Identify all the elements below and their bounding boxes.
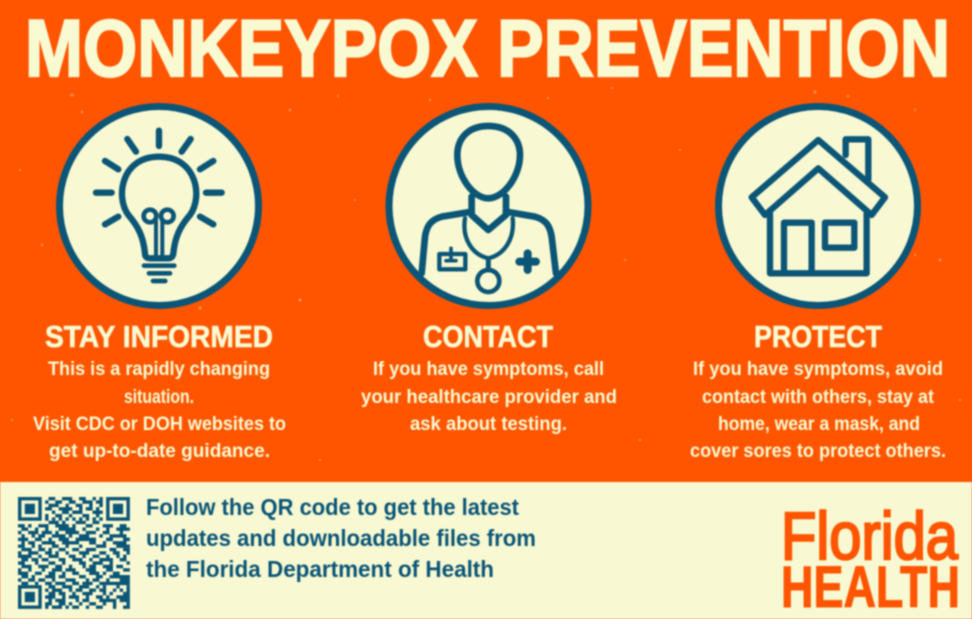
text block: QR instructions: updates and downloadable files from bbox=[146, 525, 536, 551]
panel: contact bbox=[361, 106, 617, 435]
text block: contact: your healthcare provider and bbox=[361, 387, 617, 408]
panel: stay informed bbox=[33, 106, 286, 462]
text block: QR instructions: Follow the QR code to get the latest bbox=[146, 494, 519, 520]
panel: footer bbox=[0, 482, 972, 619]
panel: protect bbox=[690, 106, 946, 462]
logo: Florida Health bbox=[781, 499, 960, 619]
text block: protect: cover sores to protect others. bbox=[690, 441, 946, 462]
text block: contact: ask about testing. bbox=[410, 414, 567, 435]
text block: stay informed: This is a rapidly changing bbox=[48, 359, 270, 380]
text block: stay informed: get up-to-date guidance. bbox=[49, 441, 270, 462]
text block: protect: contact with others, stay at bbox=[702, 387, 935, 408]
heading: contact: CONTACT bbox=[423, 319, 553, 354]
text block: protect bbox=[690, 359, 946, 462]
text block: stay informed: situation. bbox=[124, 387, 194, 408]
text block: QR instructions bbox=[146, 494, 536, 582]
heading: protect: PROTECT bbox=[754, 319, 882, 354]
text block: stay informed bbox=[33, 359, 286, 462]
icon: light bulb bbox=[60, 106, 258, 306]
text block: contact: If you have symptoms, call bbox=[373, 359, 604, 380]
icon: doctor bbox=[389, 106, 588, 306]
text block: contact bbox=[361, 359, 617, 435]
text block: QR instructions: the Florida Department of Health bbox=[146, 556, 494, 582]
QR code bbox=[18, 499, 130, 607]
text block: stay informed: Visit CDC or DOH websites to bbox=[33, 414, 286, 435]
icon: house bbox=[718, 106, 918, 306]
heading: stay informed: STAY INFORMED bbox=[45, 319, 273, 354]
text block: protect: home, wear a mask, and bbox=[718, 414, 920, 435]
text block: protect: If you have symptoms, avoid bbox=[693, 359, 943, 380]
